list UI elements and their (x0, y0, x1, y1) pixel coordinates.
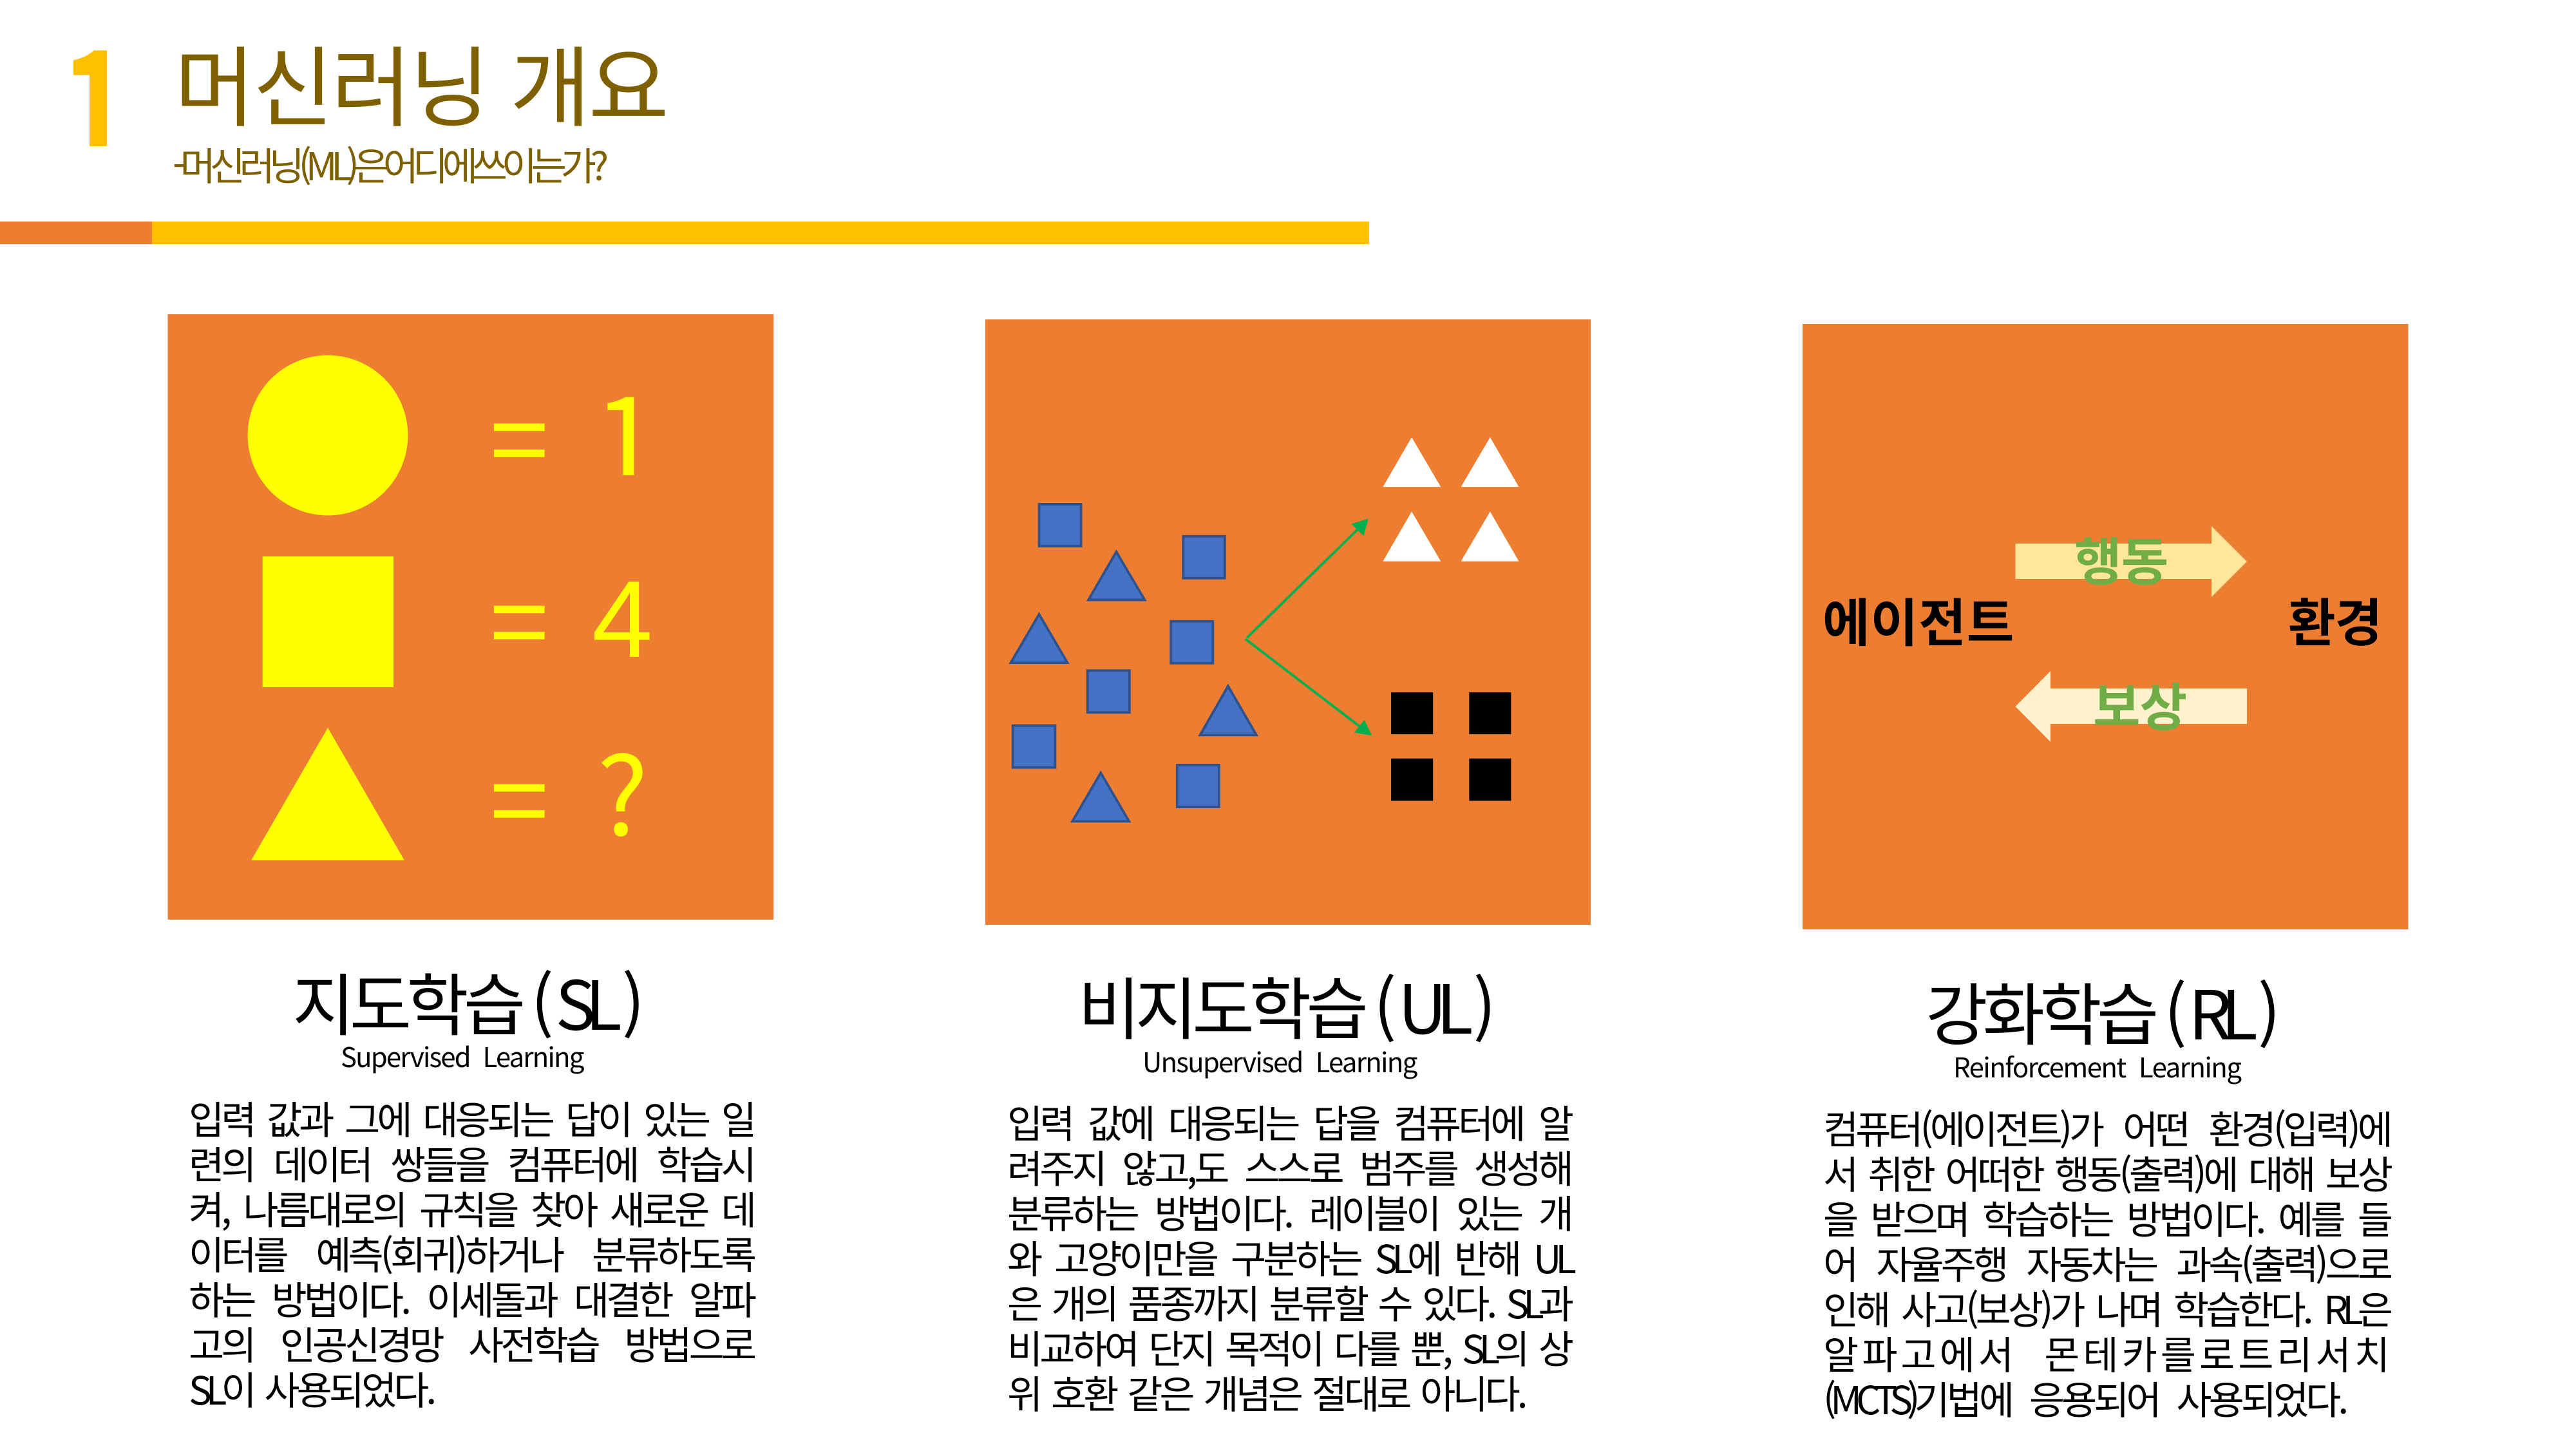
icon: yellow square (263, 556, 393, 687)
text block: unsupervised learning: 은 개의 품종까지 분류할 수 있다. SL과 (1007, 1274, 1571, 1330)
text block: supervised learning (189, 1090, 756, 1416)
equation: circle equals 1 (493, 397, 634, 475)
heading: supervised learning: 지도학습 ( SL ) (292, 952, 636, 1050)
equation: square equals 4 (489, 558, 653, 681)
text block: supervised learning: 이터를 예측(회귀)하거나 분류하도록 (189, 1225, 753, 1281)
panel: reinforcement learning illustration (1803, 324, 2409, 929)
text block: reinforcement learning: 서 취한 어떠한 행동(출력)에 대해 보상 (1823, 1144, 2390, 1200)
title: 머신러닝 개요 (175, 18, 667, 145)
header bar orange accent (0, 222, 152, 244)
arrow: action (2016, 526, 2247, 597)
subheading: unsupervised learning: Unsupervised Learning (1142, 1041, 1416, 1081)
equation: circle equals 1: = (489, 381, 550, 497)
label: agent: 에이전트 (1823, 582, 2014, 657)
heading: reinforcement learning: 강화학습 ( RL ) (1926, 961, 2272, 1059)
subheading: reinforcement learning: Reinforcement Learning (1953, 1046, 2240, 1086)
equation: triangle equals question mark: ? (597, 711, 649, 867)
text block: reinforcement learning: 인해 사고(보상)가 나며 학습한다. RL은 (1823, 1280, 2390, 1336)
text block: unsupervised learning: 비교하여 단지 목적이 다를 뿐, SL의 상 (1007, 1319, 1571, 1375)
text block: reinforcement learning: 알파고에서 몬테카를로트리서치 (1823, 1325, 2393, 1381)
text block: unsupervised learning (1007, 1094, 1575, 1420)
arrow: reward (2016, 671, 2247, 742)
text block: reinforcement learning: 어 자율주행 자동차는 과속(출력)으로 (1823, 1235, 2390, 1291)
text block: unsupervised learning: 입력 값에 대응되는 답을 컴퓨터에 알 (1007, 1094, 1571, 1150)
equation: triangle equals question mark (489, 711, 649, 867)
cluster: black squares (1391, 692, 1511, 800)
text block: unsupervised learning: 려주지 않고,도 스스로 범주를 생성해 (1007, 1139, 1571, 1195)
equation: square equals 4: 4 (592, 558, 653, 681)
text block: reinforcement learning (1823, 1099, 2393, 1426)
equation: square equals 4: = (489, 563, 550, 679)
equation: circle equals 1: 1 (593, 346, 659, 519)
text block: reinforcement learning: 컴퓨터(에이전트)가 어떤 환경(입력)에 (1823, 1099, 2390, 1155)
text block: supervised learning: 하는 방법이다. 이세돌과 대결한 알파 (189, 1270, 753, 1326)
text block: supervised learning: 고의 인공신경망 사전학습 방법으로 (189, 1315, 753, 1371)
text block: unsupervised learning: 위 호환 같은 개념은 절대로 아니다. (1007, 1364, 1525, 1420)
subheading: supervised learning: Supervised Learning (341, 1036, 583, 1075)
text block: supervised learning: 입력 값과 그에 대응되는 답이 있는 일 (189, 1090, 753, 1146)
label: action: 행동 (2074, 521, 2168, 596)
text block: reinforcement learning: 을 받으며 학습하는 방법이다. 예를 들 (1823, 1189, 2390, 1245)
text block: reinforcement learning: (MCTS)기법에 응용되어 사용되었다. (1823, 1370, 2345, 1426)
text block: supervised learning: 켜, 나름대로의 규칙을 찾아 새로운 데 (189, 1180, 753, 1236)
icon: yellow triangle (251, 728, 404, 860)
equation: triangle equals question mark: = (489, 741, 550, 858)
label: reward: 보상 (2093, 667, 2186, 741)
panel: unsupervised learning illustration (985, 319, 1591, 925)
arrow: to triangle cluster (1247, 518, 1368, 638)
arrow: to square cluster (1245, 639, 1372, 735)
text block: supervised learning: SL이 사용되었다. (189, 1360, 433, 1416)
subtitle: -머신러닝(ML)은어디에쓰이는가? (173, 136, 603, 192)
text block: unsupervised learning: 분류하는 방법이다. 레이블이 있는 개 (1007, 1184, 1571, 1240)
text block: supervised learning: 련의 데이터 쌍들을 컴퓨터에 학습시 (189, 1135, 753, 1191)
unlabeled data: blue shapes (1011, 504, 1256, 821)
header bar (0, 222, 1369, 244)
heading: unsupervised learning: 비지도학습 ( UL ) (1078, 956, 1487, 1054)
label: environment: 환경 (2288, 582, 2382, 657)
panel: supervised learning illustration (167, 314, 773, 920)
text block: unsupervised learning: 와 고양이만을 구분하는 SL에 반해 UL (1007, 1229, 1571, 1285)
cluster: white triangles (1383, 437, 1519, 562)
icon: yellow circle (248, 355, 408, 515)
